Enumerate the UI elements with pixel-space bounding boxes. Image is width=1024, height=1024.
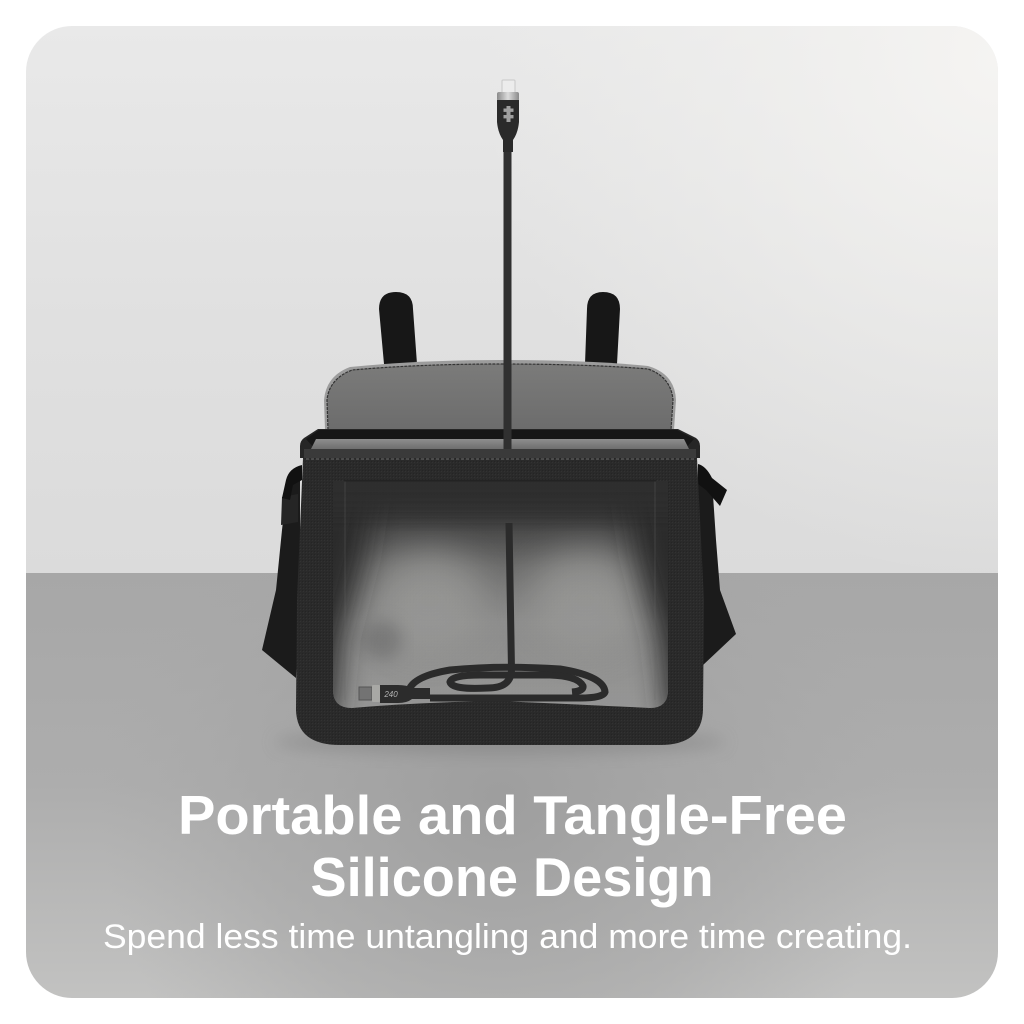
left flap tab [379, 292, 417, 364]
240W label: 240 [383, 690, 398, 699]
translucent window [333, 482, 668, 708]
wall [26, 26, 998, 573]
top fade [300, 450, 700, 512]
bag front body [296, 450, 704, 745]
pocket top edge [344, 480, 656, 482]
cable bottom connector [359, 685, 430, 703]
right fade [618, 513, 668, 708]
right flap tab [585, 292, 620, 364]
cable top connector [497, 80, 519, 152]
heading: Silicone Design [310, 846, 714, 908]
upright cable [504, 148, 512, 449]
left shoulder strap [262, 465, 302, 678]
coiled cable [409, 667, 605, 698]
heading [178, 784, 847, 908]
bag shadow [275, 730, 725, 754]
bag opening rim [300, 429, 700, 459]
subheading: Spend less time untangling and more time creating. [103, 918, 912, 956]
floor [26, 573, 998, 998]
cable seen through bag [450, 523, 583, 692]
cable [359, 80, 605, 703]
left fade [333, 513, 382, 708]
bag [262, 292, 736, 745]
heading: Portable and Tangle-Free [178, 784, 847, 846]
right shoulder strap [696, 464, 736, 666]
brand mark [504, 106, 514, 122]
pocket stitch edges [345, 481, 655, 700]
open flap [324, 360, 676, 430]
